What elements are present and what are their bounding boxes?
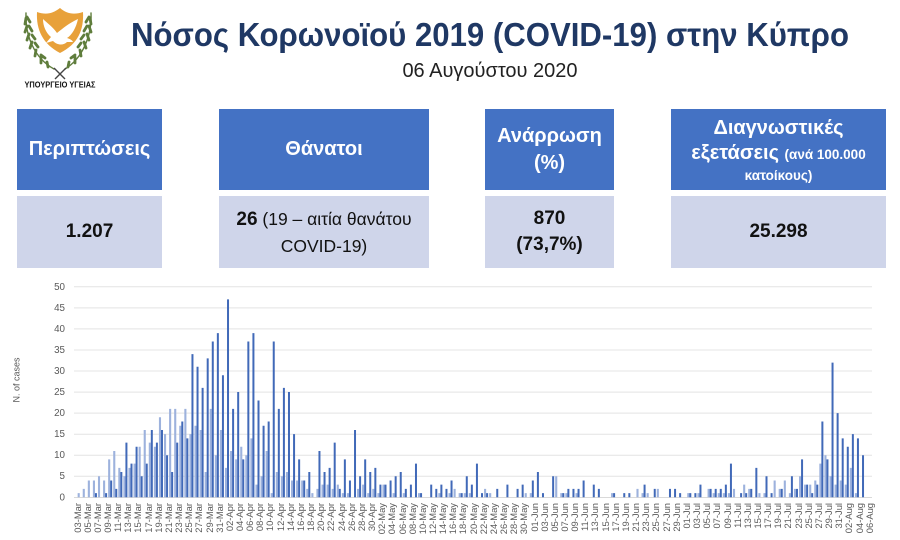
bars: dark series — [96, 299, 863, 497]
x axis date labels: 06-Apr — [244, 503, 255, 531]
x axis date labels: 12-May — [427, 503, 438, 534]
x axis date labels: 15-Jul — [752, 503, 763, 529]
x axis date labels: 22-May — [478, 503, 489, 534]
x axis date labels — [72, 503, 875, 534]
x axis date labels: 16-May — [447, 503, 458, 534]
x axis date labels: 04-Apr — [234, 503, 245, 531]
bar chart: daily cases — [12, 282, 872, 504]
x axis date labels: 05-Mar — [82, 503, 93, 533]
icon: orange shield — [37, 8, 83, 53]
x axis date labels: 01-Jun — [529, 503, 540, 532]
x axis date labels: 09-Jul — [722, 503, 732, 529]
icon: crossed swords — [54, 68, 66, 79]
x axis date labels: 20-May — [468, 503, 479, 534]
x axis date labels: 21-Jul — [782, 503, 793, 529]
x axis date labels: 19-Mar — [153, 503, 164, 533]
x axis date labels: 11-Jun — [579, 503, 590, 531]
x axis date labels: 18-Apr — [305, 503, 316, 531]
panel: tests value: 25.298 — [749, 221, 808, 242]
x axis date labels: 06-May — [396, 503, 408, 534]
x axis date labels: 09-Mar — [102, 503, 113, 533]
y axis gridlines — [74, 287, 872, 498]
x axis date labels: 28-Apr — [356, 503, 367, 531]
x axis date labels: 14-May — [437, 503, 448, 534]
y axis labels: 50 — [54, 282, 66, 293]
x axis date labels: 06-Aug — [864, 503, 875, 533]
panel: tests heading: κατοίκους) — [745, 168, 812, 183]
x axis date labels: 29-Mar — [204, 503, 215, 533]
panel: deaths value — [219, 196, 429, 268]
y axis labels: 20 — [54, 408, 66, 419]
x axis date labels: 25-Jun — [650, 503, 661, 532]
panel: recovery value: (73,7%) — [516, 234, 583, 255]
icon: white dove — [43, 19, 78, 45]
x axis date labels: 03-Mar — [72, 503, 82, 533]
x axis date labels: 07-Mar — [92, 503, 103, 533]
y axis labels: 10 — [54, 450, 66, 461]
x axis date labels: 16-Apr — [295, 503, 306, 531]
subtitle: date: 06 Αυγούστου 2020 — [402, 60, 578, 82]
x axis date labels: 22-Apr — [325, 503, 336, 531]
logo: Cyprus coat of arms with ministry name — [24, 8, 96, 90]
y axis labels: 25 — [54, 387, 66, 398]
x axis date labels: 11-Mar — [112, 503, 123, 532]
x axis date labels: 31-Mar — [214, 503, 225, 533]
x axis date labels: 10-May — [417, 503, 428, 534]
panel: tests heading — [671, 109, 886, 190]
x axis date labels: 30-May — [518, 503, 529, 534]
panel: recovery heading — [485, 109, 614, 190]
x axis date labels: 02-Apr — [224, 503, 235, 531]
y axis labels: 35 — [54, 345, 66, 356]
x axis date labels: 03-Jul — [691, 503, 702, 529]
panel: cases heading — [17, 109, 162, 190]
x axis date labels: 05-Jul — [701, 503, 712, 529]
x axis date labels: 03-Jun — [539, 503, 550, 532]
x axis date labels: 08-Apr — [254, 503, 265, 531]
x axis date labels: 31-Jul — [833, 503, 844, 529]
panel: deaths heading: Θάνατοι — [285, 138, 363, 160]
x axis date labels: 15-Jun — [600, 503, 611, 532]
x axis date labels: 23-Jul — [793, 503, 804, 529]
x axis date labels: 20-Apr — [315, 503, 326, 531]
y axis title: N. of cases — [12, 357, 22, 403]
x axis date labels: 26-Apr — [346, 503, 357, 531]
x axis date labels: 01-Jul — [681, 503, 692, 529]
panel: cases heading: Περιπτώσεις — [29, 138, 150, 160]
x axis date labels: 27-Jul — [813, 503, 824, 529]
y axis labels: 15 — [54, 429, 66, 440]
x axis date labels: 17-Jul — [762, 503, 773, 529]
x axis date labels: 30-Apr — [366, 503, 377, 531]
x axis date labels: 08-May — [407, 503, 418, 534]
x axis date labels: 19-Jul — [772, 503, 783, 529]
x axis date labels: 13-Mar — [122, 503, 133, 533]
icon: laurel branches — [25, 13, 91, 69]
x axis date labels: 07-Jul — [711, 503, 722, 529]
x axis date labels: 21-Jun — [630, 503, 641, 532]
x axis date labels: 15-Mar — [132, 503, 143, 533]
x axis date labels: 04-May — [386, 503, 397, 534]
x axis date labels: 29-Jun — [671, 503, 682, 532]
panel: recovery value — [485, 196, 614, 268]
x axis date labels: 23-Jun — [640, 503, 651, 532]
y axis labels: 0 — [60, 492, 66, 504]
x axis date labels: 02-Aug — [843, 503, 854, 533]
x axis date labels: 09-Jun — [569, 503, 580, 532]
ministry name: ΥΠΟΥΡΓΕΙΟ ΥΓΕΙΑΣ — [24, 80, 96, 90]
x axis date labels: 11-Jul — [732, 503, 743, 528]
x axis date labels: 27-Jun — [661, 503, 672, 532]
x axis date labels: 26-May — [498, 503, 509, 534]
panel: tests value — [671, 196, 886, 268]
x axis date labels: 13-Jul — [742, 503, 753, 529]
x axis date labels: 24-Apr — [336, 503, 347, 531]
x axis date labels: 25-Jul — [803, 503, 814, 529]
x axis date labels: 24-May — [488, 503, 499, 534]
panel: recovery heading: (%) — [534, 152, 565, 174]
panel: deaths heading — [219, 109, 429, 190]
x axis date labels: 17-Mar — [143, 503, 154, 533]
bars: light series — [79, 409, 856, 497]
x axis date labels: 07-Jun — [559, 503, 570, 532]
x axis date labels: 25-Mar — [183, 503, 194, 533]
x axis date labels: 18-May — [457, 503, 468, 534]
y axis labels — [54, 282, 66, 504]
panel: cases value: 1.207 — [66, 221, 113, 242]
x axis date labels: 13-Jun — [589, 503, 600, 532]
x axis date labels: 19-Jun — [620, 503, 631, 532]
x axis date labels: 02-May — [376, 503, 387, 534]
panel: deaths value: 26 (19 – αιτία θανάτου COVID-19) — [236, 208, 412, 256]
x axis date labels: 28-May — [508, 503, 519, 534]
panel: cases value — [17, 196, 162, 268]
panel: tests heading: Διαγνωστικές — [713, 117, 844, 139]
x axis date labels: 29-Jul — [823, 503, 834, 529]
y axis labels: 45 — [54, 303, 66, 314]
y axis labels: 5 — [60, 471, 66, 482]
panel: recovery value: 870 — [534, 208, 565, 229]
panel: recovery heading: Ανάρρωση — [497, 124, 602, 146]
y axis labels: 30 — [54, 366, 66, 377]
x axis date labels: 05-Jun — [549, 503, 560, 532]
x axis date labels: 23-Mar — [173, 503, 184, 533]
x axis date labels: 12-Apr — [275, 503, 286, 531]
panel: tests heading: εξετάσεις (ανά 100.000 — [691, 142, 866, 164]
y axis labels: 40 — [54, 324, 66, 335]
x axis date labels: 10-Apr — [264, 503, 275, 531]
x axis date labels: 14-Apr — [285, 503, 296, 531]
x axis date labels: 21-Mar — [163, 503, 174, 533]
x axis date labels: 17-Jun — [610, 503, 621, 532]
x axis date labels: 27-Mar — [193, 503, 204, 533]
x axis date labels: 04-Aug — [854, 503, 865, 533]
